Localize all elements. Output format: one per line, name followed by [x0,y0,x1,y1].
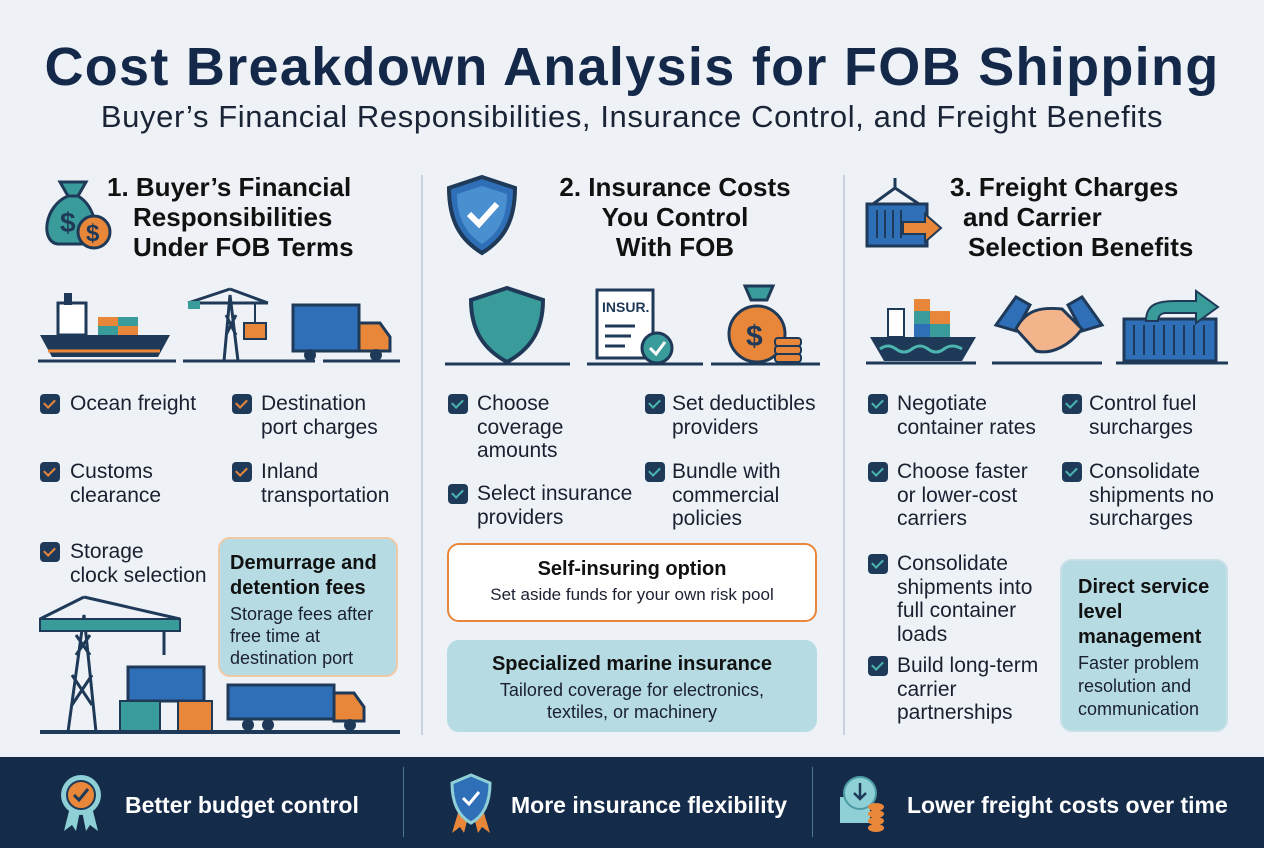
checklist: partnerships [897,701,1013,724]
panel: insurance costs [445,172,820,732]
checklist: surcharges [1089,507,1193,530]
checklist: Choose [477,392,549,415]
illustrations: ship crane truck [38,288,400,362]
icon: shield ribbon [450,773,492,833]
heading: Responsibilities [133,202,332,232]
footer item: budget control [61,775,359,831]
icon: money bag: $ [60,207,76,238]
illustrations: shield doc coins: $ [746,320,763,353]
callout: self-insuring: Self-insuring option [538,558,726,580]
callout: direct service level management [1060,559,1228,732]
heading: 1. Buyer’s Financial [107,172,351,202]
checklist: Build long-term [897,654,1038,677]
footer band [0,757,1264,848]
heading: 2. Insurance Costs [559,172,791,202]
icon: coins [840,776,884,832]
checklist: providers [477,506,563,528]
checklist: Consolidate [1089,460,1200,483]
title: Cost Breakdown Analysis for FOB Shipping [44,37,1220,97]
checklist: commercial [672,484,779,506]
checklist: port charges [261,416,378,438]
subtitle: Buyer’s Financial Responsibilities, Insurance Control, and Freight Benefits [101,99,1163,134]
checklist: shipments into [897,576,1032,598]
heading: Under FOB Terms [133,232,354,262]
illustrations: shield doc coins: INSUR. [602,299,649,315]
callout: specialized marine insurance: Tailored coverage for electronics, [500,680,764,700]
checklist [868,392,1214,724]
checklist: Ocean freight [70,392,196,415]
footer item: insurance flexibility: More insurance flexibility [511,792,787,818]
callout: direct service level management: Faster problem resolution and communication [1078,653,1199,719]
checklist: Customs [70,460,153,483]
callout: specialized marine insurance [447,640,817,732]
footer item: lower freight costs: Lower freight costs over time [907,792,1228,818]
checklist: shipments no [1089,484,1214,506]
illustrations: shield doc coins [445,284,820,366]
illustrations: ship handshake container [866,289,1228,364]
checklist: transportation [261,484,389,506]
checklist: Destination [261,392,366,415]
footer item: budget control: Better budget control [125,792,359,818]
callout: self-insuring: Set aside funds for your own risk pool [490,585,774,604]
heading [107,172,354,262]
checklist: Bundle with [672,460,781,483]
icon: money bag: $ [86,220,100,247]
callout: specialized marine insurance: Specialized marine insurance [492,653,772,675]
heading [950,172,1193,262]
heading: You Control [602,202,748,232]
illustration: port crane and truck [39,596,400,734]
checklist: or lower-cost [897,484,1017,506]
footer item: insurance flexibility [450,773,787,833]
checklist: amounts [477,439,558,462]
checklist [40,392,389,586]
checklist: Set deductibles [672,392,816,415]
icon: shield [447,174,517,256]
checklist [448,392,816,530]
checklist: Inland [261,460,318,483]
checklist: policies [672,507,742,530]
checklist: providers [672,416,758,438]
panel: freight charges [866,172,1228,732]
callout: demurrage [218,537,398,677]
heading: and Carrier [963,202,1102,232]
callout: specialized marine insurance: textiles, or machinery [547,702,717,722]
callout: self-insuring [447,543,817,622]
checklist: full container [897,599,1016,622]
heading [559,172,791,262]
checklist: Negotiate [897,392,987,415]
checklist: Choose faster [897,460,1028,483]
panel: buyer responsibilities [38,172,400,734]
heading: 3. Freight Charges [950,172,1178,202]
checklist: clock selection [70,564,207,586]
heading: With FOB [616,232,734,262]
checklist: clearance [70,484,161,506]
checklist: coverage [477,416,563,438]
checklist: carriers [897,507,967,530]
footer item: lower freight costs [840,776,1228,832]
callout: demurrage: Storage fees after free time at destination port [230,604,373,668]
checklist: Consolidate [897,552,1008,575]
heading: Selection Benefits [968,232,1193,262]
icon: award ribbon [61,775,101,831]
checklist: container rates [897,416,1036,438]
checklist: loads [897,622,947,646]
checklist: Select insurance [477,482,632,505]
icon: money bag [45,180,112,250]
icon: container with arrow [866,178,942,248]
checklist: carrier [897,678,957,700]
checklist: surcharges [1089,416,1193,438]
checklist: Storage [70,540,144,563]
checklist: Control fuel [1089,392,1196,415]
callout: direct service level management: Direct service level management [1078,576,1209,648]
callout: demurrage: Demurrage and detention fees [230,552,377,599]
